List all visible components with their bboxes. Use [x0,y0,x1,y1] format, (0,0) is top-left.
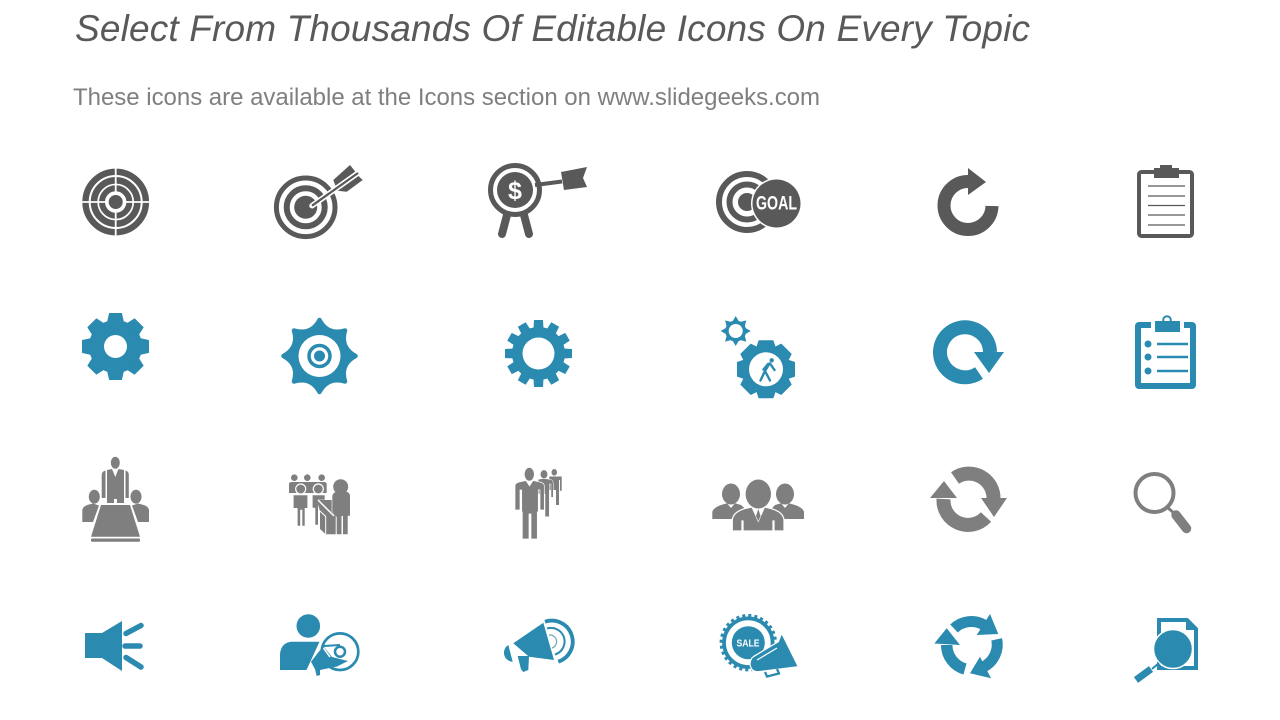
icon: goal target: GOAL [756,194,797,214]
icon: gear with eight teeth [82,314,148,380]
icon: circular arrow [940,327,1004,377]
icon: line of business people [515,468,562,539]
icon: dollar target with dart [490,166,587,234]
icon: business team heads [712,480,804,531]
icon: goal target [719,174,802,230]
icon: magnifying glass [1136,474,1186,528]
icon: sale badge with megaphone: SALE [736,637,760,649]
subtitle: These icons are available at the Icons section on www.slidegeeks.com [73,84,820,111]
icon: boardroom meeting [82,457,149,542]
icon: megaphone with sound waves [504,621,573,672]
icon: recycle arrows [934,614,998,678]
icon: team with presenter [289,474,350,534]
icon: dollar target with dart: $ [508,177,522,205]
icon: loudspeaker [85,621,141,671]
icon: crosshair target [81,167,150,237]
icon: person with megaphone [280,614,358,676]
title: Select From Thousands Of Editable Icons On Every Topic [75,8,1030,49]
icon: wavy gear with target [284,320,356,392]
icon: sale badge with megaphone [721,616,798,676]
icon: gears with walking person [721,316,794,398]
icon: target with arrow [276,165,363,237]
icon: checklist clipboard [1138,316,1193,386]
icon: redo arrow [944,168,992,229]
icon: refresh arrows [930,474,1007,525]
icon: twelve tooth gear [505,320,572,387]
icon: document magnifier [1136,618,1198,680]
icon: clipboard [1139,165,1192,236]
